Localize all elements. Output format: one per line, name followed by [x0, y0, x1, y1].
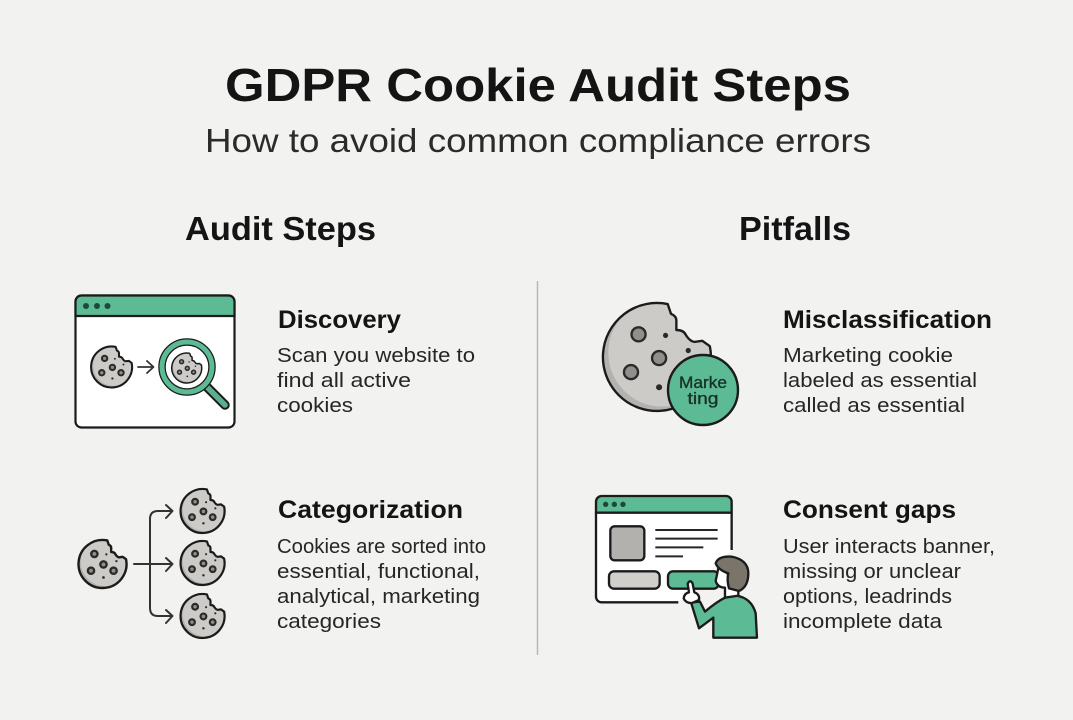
text: categorization description [277, 536, 486, 633]
text: categorization description: analytical, marketing [277, 586, 480, 608]
text: consent gaps description: incomplete data [783, 611, 943, 633]
heading: audit steps: Audit Steps [185, 210, 376, 247]
text: consent gaps description: missing or unclear [783, 561, 961, 583]
text: categorization description: categories [277, 611, 381, 633]
icon: cookie with marketing badge: Marke [679, 373, 727, 392]
panel: consent gaps [596, 496, 995, 638]
heading: discovery: Discovery [278, 306, 401, 334]
icon: cookie with marketing badge: ting [688, 389, 718, 408]
icon: cookie with marketing badge [603, 299, 738, 425]
text: consent gaps description: options, leadrinds [783, 586, 952, 608]
text: consent gaps description: User interacts banner, [783, 536, 995, 558]
text: discovery description: Scan you website to [277, 345, 475, 367]
icon: cookie sorted into three [79, 487, 227, 638]
text: misclassification description: called as essential [783, 395, 965, 417]
text: discovery description: find all active [277, 370, 411, 392]
text: categorization description: essential, functional, [277, 561, 480, 583]
text: consent gaps description [783, 536, 995, 633]
text: categorization description: Cookies are sorted into [277, 536, 486, 558]
title: GDPR Cookie Audit Steps [225, 59, 851, 111]
panel: categorization [79, 487, 486, 638]
text: discovery description [277, 345, 475, 417]
panel: discovery [76, 296, 475, 428]
icon: browser with magnifier over cookie [76, 296, 234, 428]
icon: user clicking consent banner [596, 496, 757, 638]
heading: categorization: Categorization [278, 496, 463, 524]
text: misclassification description [783, 345, 977, 417]
text: discovery description: cookies [277, 395, 353, 417]
heading: misclassification: Misclassification [783, 306, 992, 334]
heading: pitfalls: Pitfalls [739, 210, 851, 247]
subtitle: How to avoid common compliance errors [205, 122, 871, 159]
text: misclassification description: Marketing cookie [783, 345, 953, 367]
panel: misclassification [603, 299, 992, 425]
text: misclassification description: labeled as essential [783, 370, 977, 392]
heading: consent gaps: Consent gaps [783, 496, 956, 524]
